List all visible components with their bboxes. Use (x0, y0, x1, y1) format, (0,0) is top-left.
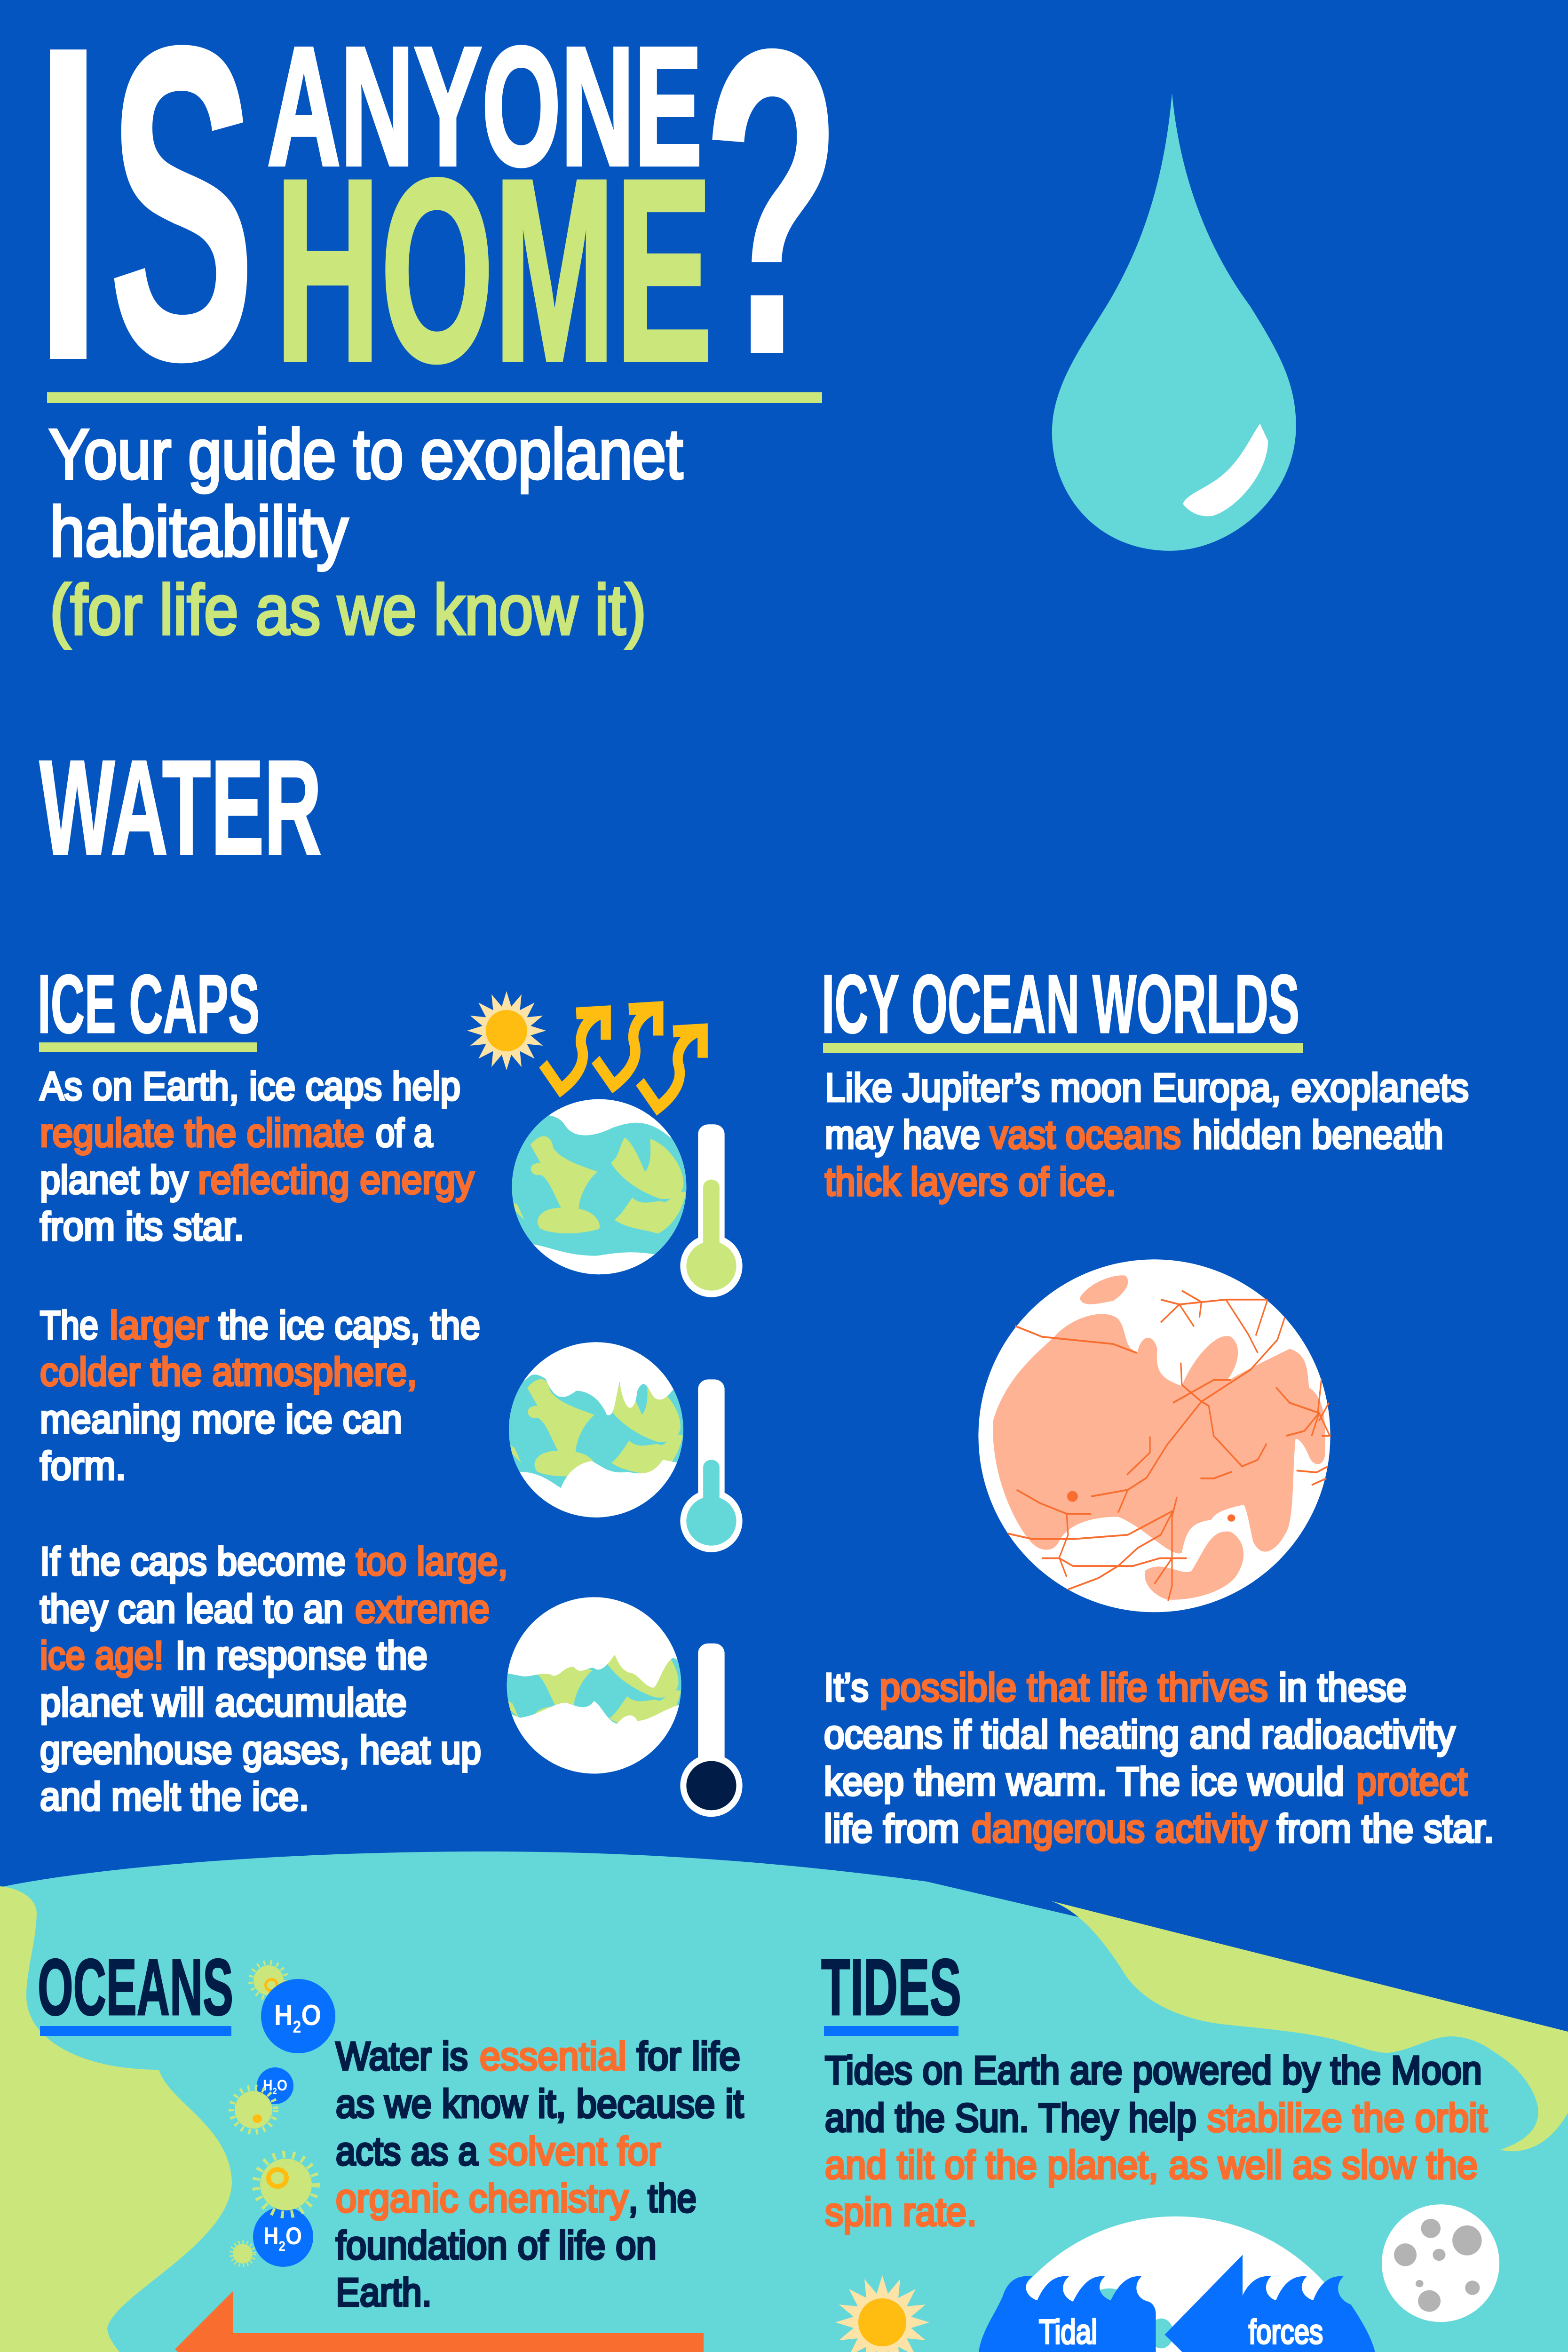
text: icy ocean worlds life: protect (1356, 1759, 1467, 1804)
icon: microbe (231, 2088, 276, 2132)
text: ice caps paragraph 2: larger (110, 1303, 209, 1347)
arrow: orange depth arrow (175, 2291, 704, 2352)
heading: ice caps: ICE CAPS (38, 958, 260, 1050)
text: ice caps paragraph 3 (40, 1539, 508, 1819)
icon: planet with larger ice caps (509, 1342, 683, 1518)
text: tides intro: and the Sun. They help (825, 2096, 1196, 2140)
heading: oceans: OCEANS (38, 1943, 233, 2032)
land: top right (1051, 1901, 1568, 2151)
ocean background (0, 1851, 1568, 2352)
text: icy ocean worlds life: dangerous activity (972, 1806, 1267, 1851)
text: icy ocean worlds life: keep them warm. The ice would (824, 1759, 1344, 1804)
text: ice caps paragraph 1: planet by (40, 1158, 188, 1202)
text: oceans paragraph 1: for life (637, 2034, 740, 2078)
icon: cool thermometer (680, 1379, 743, 1552)
title (33, 0, 842, 454)
icon: H2O molecule medium: 2 (279, 2239, 285, 2254)
tidal arrow and right wave (1164, 2255, 1375, 2352)
title: HOME (275, 125, 713, 416)
text: oceans paragraph 1: Water is (336, 2034, 468, 2078)
icon: H2O molecule small: H (263, 2077, 274, 2094)
icon: moon (1382, 2204, 1499, 2322)
icon: H2O molecule large (261, 1979, 335, 2053)
text: icy ocean worlds intro: Like Jupiter’s moon Europa, exoplanets (825, 1065, 1469, 1110)
panel: oceans (38, 1943, 744, 2352)
land: left and bottom (0, 1886, 1183, 2352)
text: ice caps paragraph 3: extreme (355, 1587, 490, 1631)
text: icy ocean worlds intro: vast oceans (990, 1112, 1181, 1157)
icon: H2O molecule medium: O (285, 2223, 302, 2250)
heading: water: WATER (40, 732, 322, 883)
text: ice caps paragraph 3: planet will accumulate (40, 1680, 407, 1724)
panel: ice caps (38, 958, 743, 1819)
icon: frozen thermometer (680, 1644, 743, 1817)
text: icy ocean worlds life: in these (1279, 1665, 1407, 1709)
text: tides intro (825, 2048, 1488, 2234)
icon: Europa-like planet (978, 1259, 1330, 1612)
text: tides intro: Tides on Earth are powered by the Moon (825, 2048, 1482, 2092)
icon: microbe (251, 1963, 286, 1998)
icon: H2O molecule small (257, 2067, 293, 2104)
text: tides intro: spin rate. (825, 2190, 977, 2234)
text: icy ocean worlds intro: thick layers of ice. (825, 1160, 1116, 1204)
left tidal wave (978, 2276, 1156, 2352)
text: ice caps paragraph 1: reflecting energy (198, 1158, 474, 1202)
text: ice caps paragraph 3: greenhouse gases, heat up (40, 1728, 481, 1772)
icon: H2O molecule large: 2 (293, 2017, 301, 2036)
icon: warm thermometer (680, 1124, 743, 1297)
icon: planet with extreme ice age (507, 1597, 681, 1773)
icon: H2O molecule large: O (301, 1999, 321, 2032)
text: icy ocean worlds intro: may have (825, 1112, 980, 1157)
icon: microbe large (256, 2154, 316, 2215)
subtitle: (for life as we know it) (50, 570, 646, 649)
subtitle: habitability (50, 492, 348, 571)
text: ice caps paragraph 3: and melt the ice. (40, 1774, 309, 1819)
icon: H2O molecule medium (253, 2207, 313, 2267)
title: ANYONE (267, 12, 702, 201)
text: oceans paragraph 1: organic chemistry (336, 2176, 628, 2220)
text: tides intro: stabilize the orbit (1207, 2096, 1488, 2140)
text: icy ocean worlds life: possible that life thrives (879, 1665, 1268, 1709)
text: oceans paragraph 1: , the (628, 2176, 697, 2220)
icon: sun (467, 991, 546, 1070)
icon: microbe behind molecule (231, 2242, 254, 2265)
panel: tides (821, 1943, 1540, 2352)
text: ice caps paragraph 1 (40, 1064, 474, 1248)
text: ice caps paragraph 2: form. (40, 1444, 126, 1488)
text: icy ocean worlds intro (825, 1065, 1469, 1204)
text: ice caps paragraph 1: of a (376, 1111, 433, 1155)
text: ice caps paragraph 3: In response the (175, 1633, 428, 1677)
text: ice caps paragraph 2: The (40, 1303, 98, 1347)
text: ice caps paragraph 1: regulate the climate (40, 1111, 364, 1155)
icon: planet with small ice caps (512, 1099, 687, 1275)
text: icy ocean worlds life: oceans if tidal heating and radioactivity (824, 1712, 1455, 1756)
text: ice caps paragraph 3: they can lead to an (40, 1587, 343, 1631)
heading: tides: TIDES (821, 1943, 961, 2032)
title rule (47, 392, 822, 403)
label: tidal: Tidal (1039, 2313, 1097, 2351)
icon: sun (835, 2275, 929, 2352)
icon: reflected energy arrows (543, 1008, 703, 1108)
text: icy ocean worlds life: It’s (824, 1665, 869, 1709)
text: oceans paragraph 1: acts as a (336, 2129, 478, 2173)
text: icy ocean worlds intro: hidden beneath (1192, 1112, 1443, 1157)
text: ice caps paragraph 2 (40, 1303, 480, 1488)
icon: H2O molecule small: 2 (273, 2087, 277, 2097)
text: icy ocean worlds life: from the star. (1277, 1806, 1494, 1851)
text: icy ocean worlds life (824, 1665, 1494, 1851)
text: ice caps paragraph 3: ice age! (40, 1633, 164, 1677)
text: icy ocean worlds life: life from (824, 1806, 959, 1851)
label: forces: forces (1249, 2313, 1323, 2351)
text: ice caps paragraph 2: colder the atmosphere, (40, 1350, 417, 1394)
text: ice caps paragraph 1: As on Earth, ice caps help (40, 1064, 460, 1108)
text: oceans paragraph 1: foundation of life on (336, 2223, 657, 2267)
icon: planet with tidal forces and spin (976, 2217, 1375, 2352)
text: oceans paragraph 1: Earth. (336, 2270, 432, 2314)
text: ice caps paragraph 3: If the caps become (40, 1539, 346, 1583)
subtitle: Your guide to exoplanet (49, 414, 683, 493)
text: tides intro: and tilt of the planet, as well as slow the (825, 2143, 1478, 2187)
text: ice caps paragraph 3: too large, (356, 1539, 508, 1583)
text: ice caps paragraph 2: the ice caps, the (219, 1303, 480, 1347)
icon: H2O molecule small: O (277, 2077, 287, 2094)
text: ice caps paragraph 1: from its star. (40, 1204, 244, 1248)
text: ice caps paragraph 2: meaning more ice can (40, 1397, 402, 1441)
icon: water drop (1052, 93, 1296, 551)
text: oceans paragraph 1: as we know it, because it (336, 2082, 744, 2126)
text: oceans paragraph 1: essential (480, 2034, 626, 2078)
text: oceans paragraph 1 (336, 2034, 744, 2314)
icon: H2O molecule large: H (274, 1999, 295, 2032)
text: oceans paragraph 1: solvent for (489, 2129, 661, 2173)
subtitle (49, 414, 683, 649)
panel: icy ocean worlds (822, 958, 1494, 1851)
icon: H2O molecule medium: H (263, 2223, 281, 2250)
